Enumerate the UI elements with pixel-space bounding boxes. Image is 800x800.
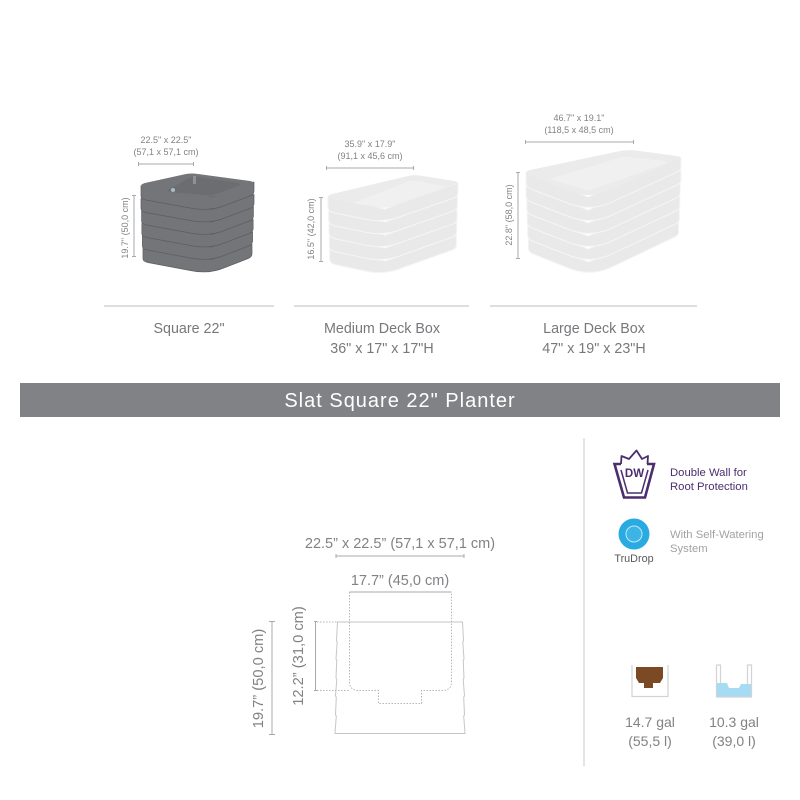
dimension: outer width: 22.5” x 22.5” (57,1 x 57,1 cm) xyxy=(305,536,495,552)
dimension: soil depth: 12.2” (31,0 cm) xyxy=(291,606,307,706)
dimension: large width: 46.7" x 19.1" xyxy=(554,113,604,123)
planter: white large deck box xyxy=(526,150,681,272)
dimension: large height xyxy=(504,172,520,258)
text: soil volume: 14.7 gal xyxy=(625,714,675,730)
baseline: medium xyxy=(294,305,469,307)
planter outline xyxy=(335,622,465,734)
icon: TruDrop xyxy=(614,518,654,565)
icon: water volume xyxy=(716,665,752,697)
baseline: large xyxy=(490,305,697,307)
baseline: square xyxy=(104,305,274,307)
panel: size comparison xyxy=(104,113,697,357)
dimension: medium width: (91,1 x 45,6 cm) xyxy=(337,151,403,161)
label: medium deck box: 36" x 17" x 17"H xyxy=(330,341,434,357)
dimension: overall height: 19.7” (50,0 cm) xyxy=(251,629,267,728)
divider xyxy=(583,438,585,766)
dimension: medium height xyxy=(306,198,323,262)
text: double wall xyxy=(670,467,748,493)
dimension: medium width: 35.9" x 17.9" xyxy=(345,139,395,149)
planter: dark grey square xyxy=(141,174,254,272)
dimension: square width: 22.5" x 22.5" xyxy=(141,135,191,145)
label: large deck box: Large Deck Box xyxy=(543,321,645,337)
panel: volumes xyxy=(625,665,759,749)
text: water volume xyxy=(709,714,759,749)
dimension: overall height xyxy=(251,622,275,734)
product: square 22 xyxy=(120,135,254,272)
label: medium deck box xyxy=(324,321,440,357)
panel: features xyxy=(614,450,764,565)
text: water volume: 10.3 gal xyxy=(709,714,759,730)
text: water volume: (39,0 l) xyxy=(712,733,756,749)
dimension: large width: (118,5 x 48,5 cm) xyxy=(544,125,614,135)
icon: double wall: DW xyxy=(625,468,644,480)
planter: white medium deck box xyxy=(328,175,458,273)
text: self-watering xyxy=(670,529,764,555)
dimension: medium height: 16.5" (42,0 cm) xyxy=(306,198,316,260)
dimension: soil depth xyxy=(291,606,317,706)
label: large deck box xyxy=(542,321,646,357)
label: medium deck box: Medium Deck Box xyxy=(324,321,440,337)
dimension: large height: 22.8" (58,0 cm) xyxy=(504,184,514,246)
icon: TruDrop: TruDrop xyxy=(614,553,654,565)
panel: technical drawing xyxy=(251,536,495,734)
reservoir dotted outline xyxy=(317,592,452,704)
text: soil volume xyxy=(625,714,675,749)
text: double wall: Double Wall for xyxy=(670,467,747,479)
dimension: square height: 19.7" (50,0 cm) xyxy=(120,197,130,259)
text: double wall: Root Protection xyxy=(670,481,748,493)
icon: double wall xyxy=(614,450,654,498)
dimension: medium width xyxy=(326,139,414,170)
label: large deck box: 47" x 19" x 23"H xyxy=(542,341,646,357)
product: large deck box xyxy=(504,113,681,272)
text: soil volume: (55,5 l) xyxy=(628,733,672,749)
dimension: inner width: 17.7” (45,0 cm) xyxy=(351,573,449,589)
title banner xyxy=(20,383,780,417)
title banner: Slat Square 22" Planter xyxy=(284,390,516,412)
product: medium deck box xyxy=(306,139,458,273)
dimension: square width: (57,1 x 57,1 cm) xyxy=(133,147,199,157)
label: square 22: Square 22" xyxy=(153,321,225,337)
icon: soil volume xyxy=(632,665,668,696)
text: self-watering: With Self-Watering xyxy=(670,529,764,541)
text: self-watering: System xyxy=(670,543,708,555)
dimension: square width xyxy=(133,135,199,166)
dimension: large width xyxy=(526,113,634,144)
